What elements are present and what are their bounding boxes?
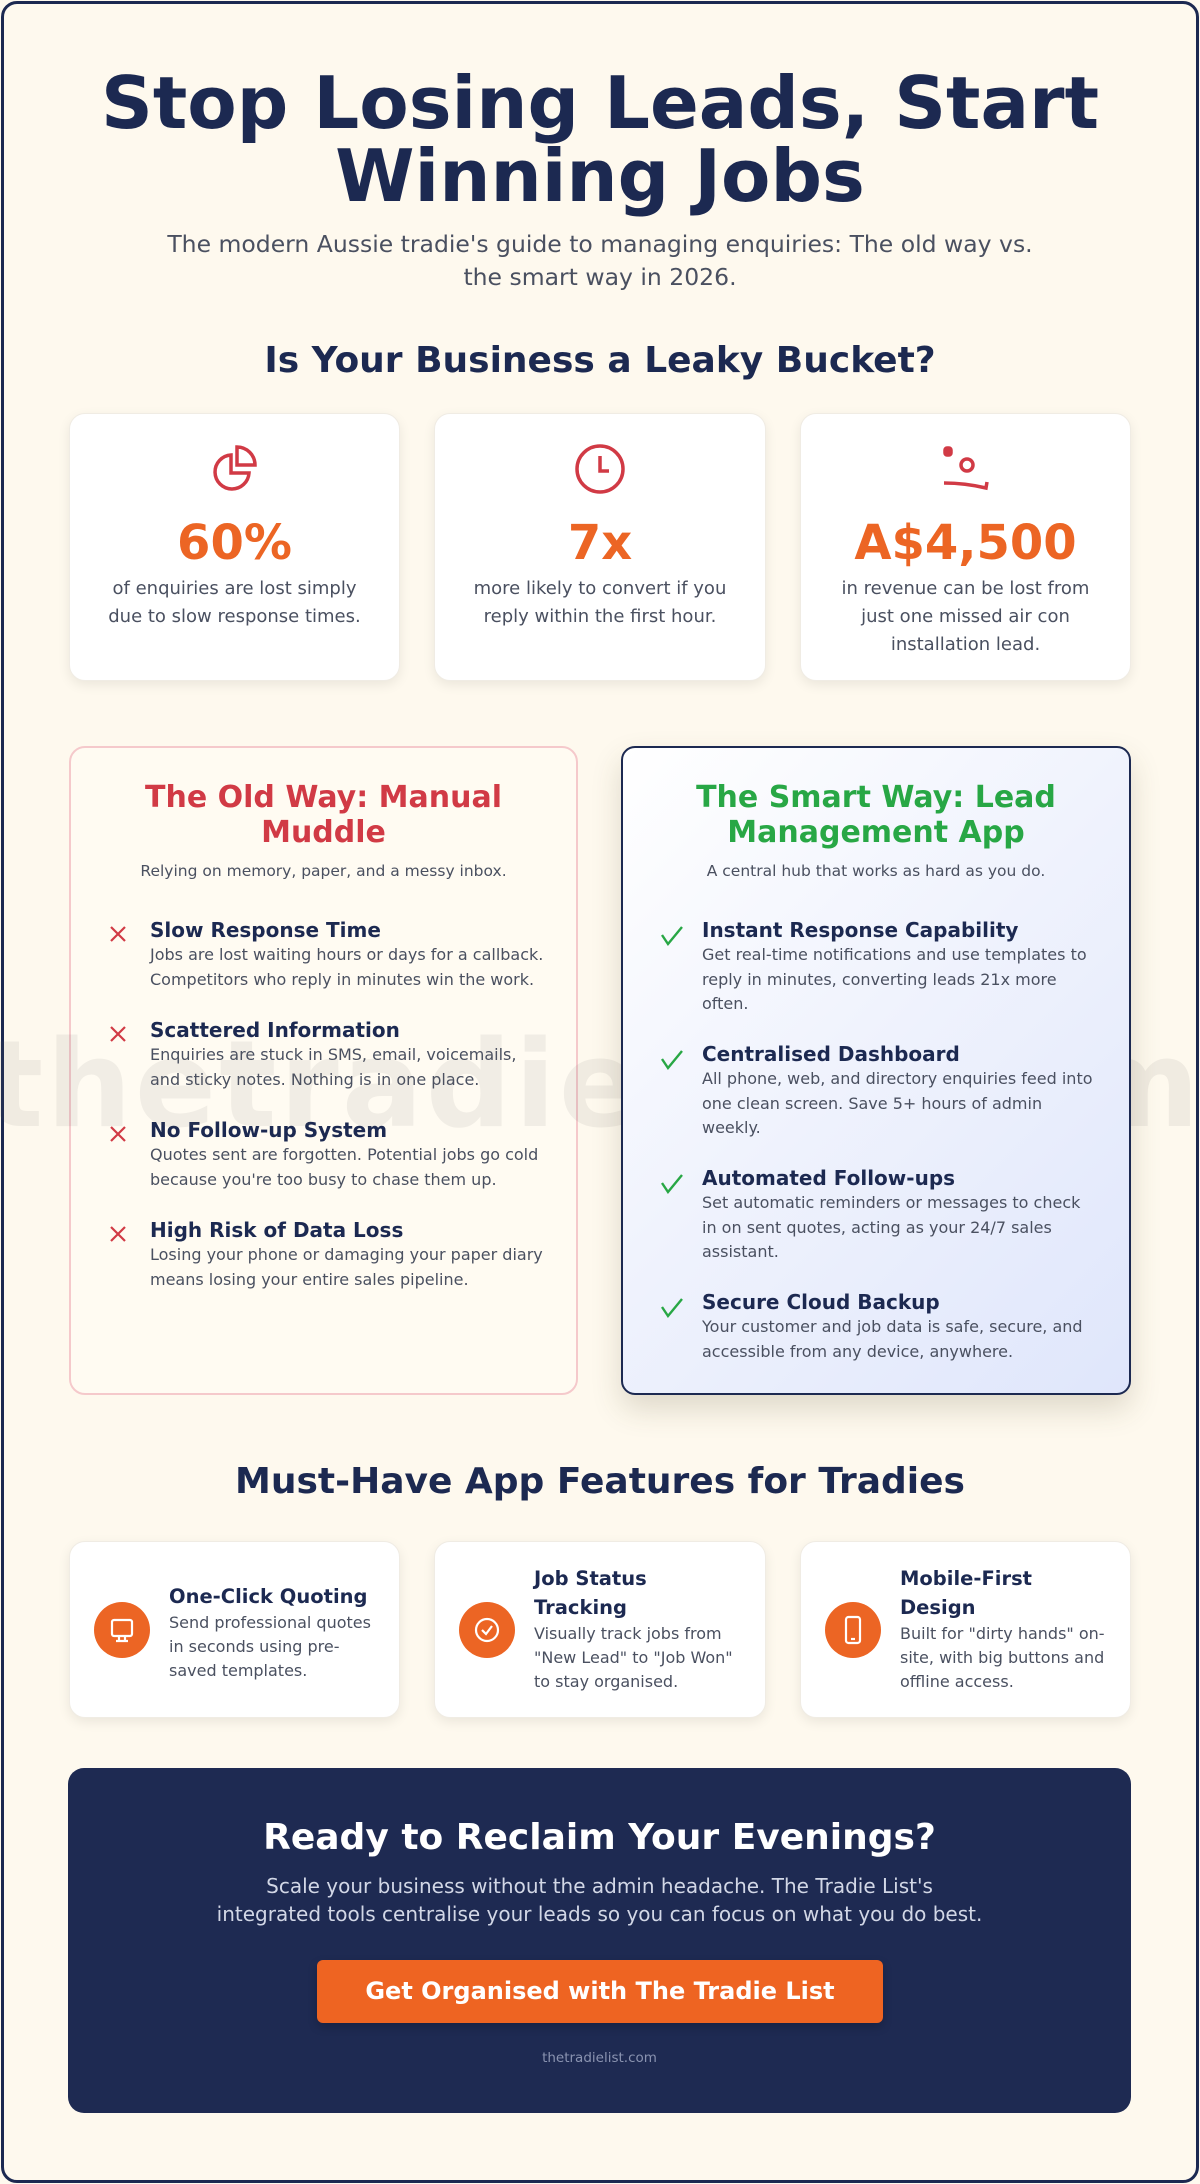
item: slow response: Slow Response Time	[150, 918, 381, 942]
item: follow-ups	[661, 1166, 1080, 1261]
item: cloud backup: Your customer and job data is safe, secure, and accessible from any device, anywhere.	[702, 1317, 1083, 1360]
title: Winning Jobs	[335, 134, 865, 218]
old way subtitle: Relying on memory, paper, and a messy inbox.	[140, 862, 507, 880]
item: data loss	[110, 1218, 543, 1288]
CTA button: Get Organised with The Tradie List	[365, 1977, 835, 2005]
item: no follow-up: Quotes sent are forgotten. Potential jobs go cold because you're too busy to chase them up.	[150, 1145, 538, 1188]
item: dashboard: All phone, web, and directory enquiries feed into one clean screen. Save 5+ hours of admin weekly.	[702, 1069, 1092, 1137]
icon: check circle	[459, 1602, 515, 1658]
feature card: job tracking: Job Status Tracking	[534, 1567, 647, 1619]
feature card: mobile: Mobile-First Design	[900, 1567, 1032, 1619]
stat card: 7x	[434, 413, 766, 681]
footer url: thetradielist.com	[542, 2050, 657, 2066]
CTA text: integrated tools centralise your leads so you can focus on what you do best.	[217, 1902, 982, 1926]
feature card: job tracking	[434, 1541, 766, 1718]
feature card: mobile	[800, 1541, 1131, 1718]
stat card: A$4,500: in revenue can be lost from just one missed air con installation lead.	[842, 578, 1089, 655]
smart way title	[696, 780, 1056, 850]
item: data loss: Losing your phone or damaging your paper diary means losing your entire sales pipeline.	[150, 1245, 543, 1288]
item: scattered info: Scattered Information	[150, 1018, 400, 1042]
smart way subtitle: A central hub that works as hard as you do.	[707, 862, 1045, 880]
CTA text	[217, 1874, 982, 1926]
item: follow-ups: Set automatic reminders or messages to check in on sent quotes, acting as your 24/7 sales assistant.	[702, 1193, 1080, 1261]
item: instant response: Get real-time notifications and use templates to reply in minutes, converting leads 21x more often.	[702, 945, 1087, 1013]
CTA text: Scale your business without the admin headache. The Tradie List's	[266, 1874, 933, 1898]
feature card: quoting: One-Click Quoting	[169, 1585, 367, 1608]
item: dashboard: Centralised Dashboard	[702, 1042, 960, 1066]
stat card: 60%: of enquiries are lost simply due to slow response times.	[108, 578, 361, 627]
feature card: mobile: Built for "dirty hands" on-site, with big buttons and offline access.	[900, 1624, 1105, 1691]
stat card: 60%	[69, 413, 400, 681]
heading: leaky bucket: Is Your Business a Leaky Bucket?	[264, 340, 936, 381]
smart way title: The Smart Way: Lead	[696, 780, 1056, 815]
stat card: A$4,500	[800, 413, 1131, 681]
title: Stop Losing Leads, Start	[101, 61, 1099, 145]
item: slow response: Jobs are lost waiting hours or days for a callback. Competitors who reply in minutes win the work.	[150, 945, 543, 988]
CTA panel	[68, 1768, 1131, 2113]
smart way title: Management App	[727, 815, 1025, 850]
item: scattered info: Enquiries are stuck in SMS, email, voicemails, and sticky notes. Nothing is in one place.	[150, 1045, 516, 1088]
item: data loss: High Risk of Data Loss	[150, 1218, 403, 1242]
subtitle: The modern Aussie tradie's guide to managing enquiries: The old way vs. the smart way in 2026.	[167, 230, 1033, 291]
item: no follow-up	[110, 1118, 538, 1188]
panel: old way	[69, 746, 578, 1395]
CTA button	[317, 1960, 883, 2023]
CTA heading: Ready to Reclaim Your Evenings?	[263, 1817, 936, 1858]
title	[101, 61, 1099, 218]
old way title	[145, 780, 502, 850]
icon: money loss	[943, 446, 989, 490]
item: dashboard	[661, 1042, 1092, 1137]
item: instant response	[661, 918, 1087, 1013]
watermark: thetradielist.com	[0, 1016, 1200, 1155]
icon: clock	[575, 444, 625, 494]
item: scattered info	[110, 1018, 516, 1088]
icon: monitor	[94, 1602, 150, 1658]
stat card: 60%: 60%	[177, 515, 292, 571]
old way title: The Old Way: Manual	[145, 780, 502, 815]
item: instant response: Instant Response Capability	[702, 918, 1018, 942]
panel: smart way	[621, 746, 1131, 1395]
item: slow response	[110, 918, 543, 988]
feature card: job tracking: Visually track jobs from "New Lead" to "Job Won" to stay organised.	[534, 1624, 733, 1691]
old way title: Muddle	[261, 815, 386, 850]
item: no follow-up: No Follow-up System	[150, 1118, 387, 1142]
icon: pie chart	[213, 445, 257, 491]
feature card: quoting	[69, 1541, 400, 1718]
feature card: quoting: Send professional quotes in seconds using pre-saved templates.	[169, 1613, 371, 1680]
heading: features: Must-Have App Features for Tradies	[235, 1461, 965, 1502]
stat card: 7x: more likely to convert if you reply within the first hour.	[474, 578, 726, 627]
stat card: 7x: 7x	[568, 515, 632, 571]
item: cloud backup: Secure Cloud Backup	[702, 1290, 940, 1314]
icon: phone	[825, 1602, 881, 1658]
item: cloud backup	[661, 1290, 1083, 1360]
stat card: A$4,500: A$4,500	[854, 515, 1077, 571]
item: follow-ups: Automated Follow-ups	[702, 1166, 955, 1190]
